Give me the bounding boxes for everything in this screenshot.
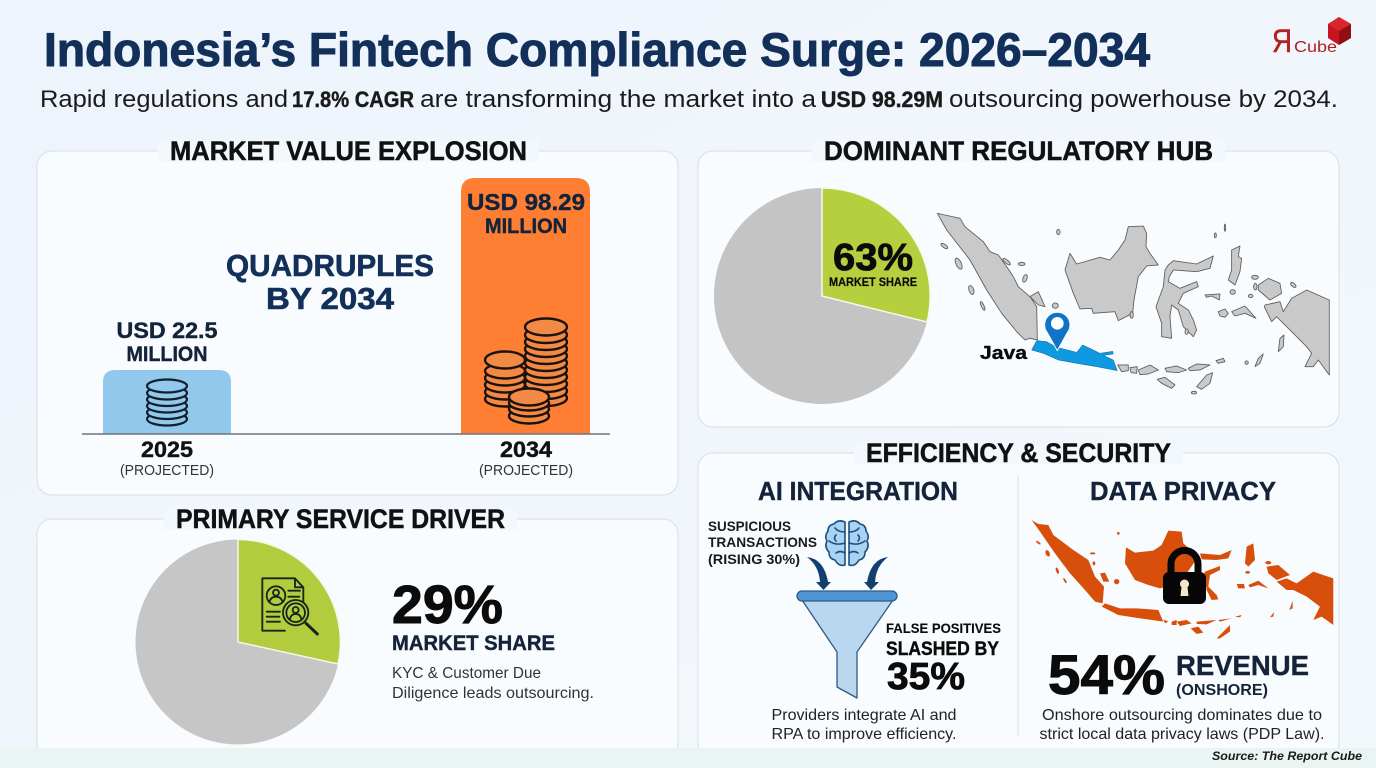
subheading: data privacy: DATA PRIVACY [1090,476,1276,506]
heading: dominant regulatory hub: DOMINANT REGULATORY HUB [824,136,1213,166]
callout: quadruples by 2034: QUADRUPLES [226,248,434,283]
stat: 29% market share [392,575,555,655]
panel: primary service driver [37,504,678,759]
axis label: 2034: 2034 [500,437,553,462]
icon: brain [826,521,868,565]
stat: 54% revenue onshore: REVENUE [1176,650,1309,681]
text: KYC description: Diligence leads outsourcing. [392,685,594,702]
icon: padlock [1163,550,1206,604]
text: privacy description [1040,707,1324,743]
logo: RCube: Cube [1294,39,1337,56]
logo: RCube: Я [1272,23,1292,59]
footer strip [0,748,1376,768]
axis label: 2025: 2025 [141,437,193,462]
text: privacy description: strict local data privacy laws (PDP Law). [1040,726,1324,743]
icon: location pin [1045,312,1070,351]
panel: dominant regulatory hub [698,136,1339,427]
stat: 63% market share: 63% [833,237,913,279]
stat: 54% revenue onshore: (ONSHORE) [1176,682,1268,699]
heading: primary service driver: PRIMARY SERVICE DRIVER [176,504,505,534]
stat: false positives slashed by 35%: SLASHED BY [886,639,999,660]
axis label: 2025: (PROJECTED) [120,462,214,479]
source note: Source: The Report Cube [1212,749,1362,763]
text: privacy description: Onshore outsourcing dominates due to [1042,707,1322,724]
axis label: 2025 [120,437,214,479]
bar: 2034 [461,178,590,434]
bar: 2025 [103,370,231,434]
label: suspicious transactions: TRANSACTIONS [708,534,817,550]
callout: quadruples by 2034 [226,248,434,316]
stat: 63% market share: MARKET SHARE [829,275,917,289]
text: KYC description: KYC & Customer Due [392,665,541,682]
stat: 54% revenue onshore [1048,643,1309,706]
stat: false positives slashed by 35%: 35% [887,656,965,698]
callout: quadruples by 2034: BY 2034 [266,281,395,316]
subtitle: are transforming the market into a [420,86,817,113]
axis line [82,433,610,435]
heading: market value explosion: MARKET VALUE EXPLOSION [170,136,527,166]
subheading: AI integration: AI INTEGRATION [758,476,958,506]
label: USD 98.29 million: USD 98.29 [467,189,585,215]
text: KYC description [392,665,594,702]
label: Java: Java [980,343,1028,363]
label: USD 98.29 million [467,189,585,238]
panel: efficiency and security [698,438,1339,759]
heading: efficiency and security: EFFICIENCY & SECURITY [866,438,1171,468]
subtitle [40,86,1338,113]
icon: small coin stack [147,380,187,426]
pie chart: 63% share [714,188,930,404]
label: USD 22.5 million: USD 22.5 [116,318,218,343]
icon: funnel [797,591,897,698]
stat: false positives slashed by 35%: FALSE POSITIVES [886,620,1001,636]
axis label: 2034 [479,437,573,479]
title: Indonesia’s Fintech Compliance Surge: 2026–2034 [44,23,1150,76]
label: suspicious transactions: SUSPICIOUS [708,518,791,534]
subtitle: 17.8% CAGR [292,87,414,112]
panel: market value explosion [37,136,678,495]
text: AI description: RPA to improve efficiency. [772,726,956,743]
label: suspicious transactions [708,518,817,567]
subtitle: outsourcing powerhouse by 2034. [949,86,1338,113]
label: suspicious transactions: (RISING 30%) [708,551,800,567]
text: AI description [772,707,956,743]
subtitle: USD 98.29M [821,87,943,112]
map: Indonesia with Java highlighted [937,213,1329,394]
axis label: 2034: (PROJECTED) [479,462,573,479]
subtitle: Rapid regulations and [40,86,288,113]
stat: 54% revenue onshore: 54% [1048,643,1165,706]
stat: 63% market share [829,237,917,289]
label: USD 22.5 million [116,318,218,366]
map: Indonesia orange [1032,520,1333,638]
label: USD 98.29 million: MILLION [485,215,567,238]
pie chart: 29% share [136,540,340,744]
logo: RCube [1272,17,1351,59]
stat: 29% market share: 29% [392,575,503,635]
icon: document with magnifier [262,578,317,634]
label: USD 22.5 million: MILLION [126,343,208,366]
text: AI description: Providers integrate AI and [772,707,956,724]
arrows: into funnel [807,557,888,590]
icon: large coin stacks [485,318,567,424]
stat: false positives slashed by 35% [886,620,1001,698]
stat: 29% market share: MARKET SHARE [392,632,555,655]
